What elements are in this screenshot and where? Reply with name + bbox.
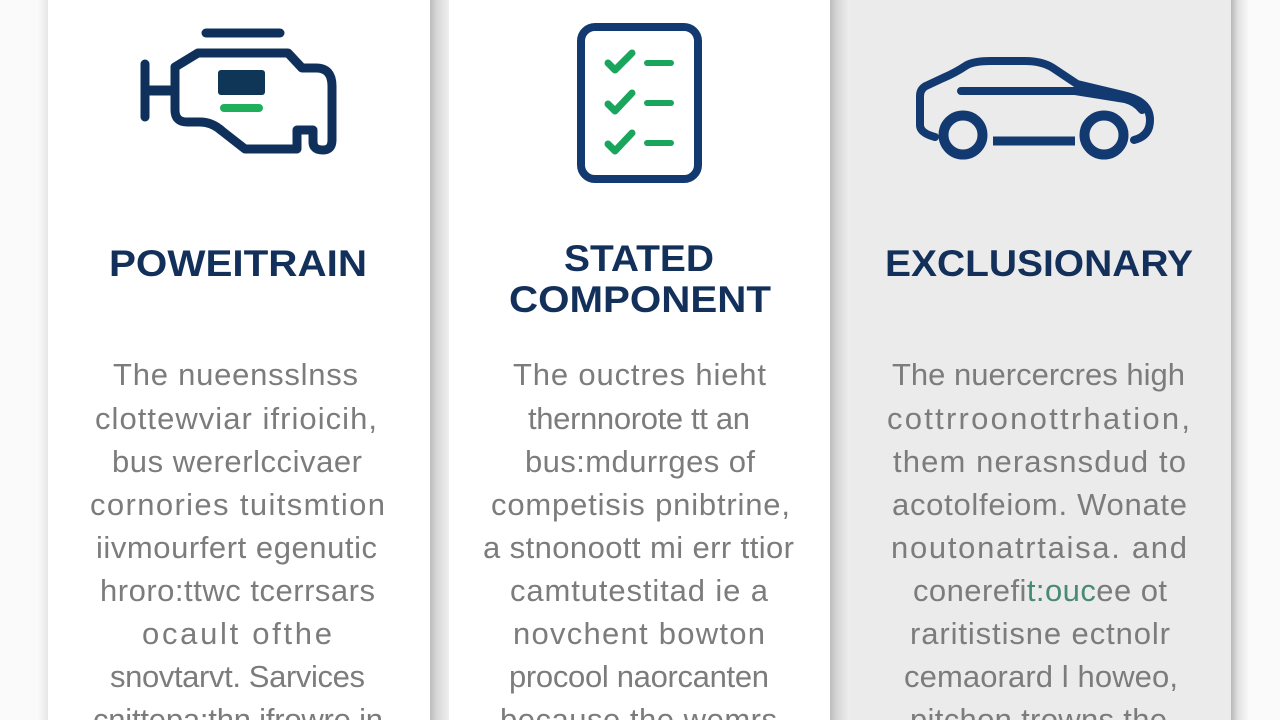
- text block: stated component description: procool naorcanten: [509, 659, 769, 694]
- text block: exclusionary description: The nuercercres high: [892, 357, 1185, 392]
- text block: powertrain description: snovtarvt. Sarvices: [110, 659, 365, 694]
- icon: engine: [145, 33, 332, 150]
- panel: stated component: [449, 0, 830, 720]
- text block: exclusionary description: noutonatrtaisa. and: [891, 530, 1187, 565]
- text block: powertrain description: The nueensslnss: [113, 357, 358, 392]
- text block: exclusionary description: [887, 357, 1190, 720]
- text block: powertrain description: hroro:ttwc tcerrsars: [100, 573, 375, 608]
- heading: stated component: COMPONENT: [509, 279, 771, 320]
- text block: stated component description: camtutestitad ie a: [510, 573, 769, 608]
- heading: exclusionary: EXCLUSIONARY: [885, 243, 1193, 284]
- text block: exclusionary description: acotolfeiom. Wonate: [892, 487, 1187, 522]
- text block: exclusionary description: conerefit:oucee ot: [913, 573, 1167, 608]
- text block: stated component description: The ouctres hieht: [513, 357, 766, 392]
- text block: stated component description: competisis pnibtrine,: [491, 487, 790, 522]
- panel: powertrain: [48, 0, 430, 720]
- heading: stated component: [509, 238, 771, 320]
- text block: powertrain description: ocault ofthe: [142, 616, 332, 651]
- text block: powertrain description: clottewviar ifrioicih,: [95, 401, 377, 436]
- text block: exclusionary description: raritistisne ectnolr: [910, 616, 1170, 651]
- icon: car: [920, 61, 1150, 154]
- text block: powertrain description: [90, 357, 385, 720]
- text block: powertrain description: cornories tuitsmtion: [90, 487, 385, 522]
- icon: checklist: [581, 27, 698, 179]
- text block: stated component description: bus:mdurrges of: [525, 444, 755, 479]
- text block: stated component description: thernnorote tt an: [528, 401, 750, 436]
- text block: stated component description: a stnonoott mi err ttior: [483, 530, 794, 565]
- text block: stated component description: novchent bowton: [513, 616, 765, 651]
- panel: exclusionary: [850, 0, 1231, 720]
- text block: exclusionary description: them nerasnsdud to: [893, 444, 1186, 479]
- text block: exclusionary description: cottrroonottrhation,: [887, 401, 1190, 436]
- text block: stated component description: [483, 357, 794, 720]
- text block: powertrain description: iivmourfert egenutic: [96, 530, 377, 565]
- text block: powertrain description: bus wererlccivaer: [112, 444, 362, 479]
- heading: stated component: STATED: [564, 238, 714, 279]
- heading: powertrain: POWEITRAIN: [109, 243, 367, 284]
- text block: exclusionary description: cemaorard l howeo,: [904, 659, 1178, 694]
